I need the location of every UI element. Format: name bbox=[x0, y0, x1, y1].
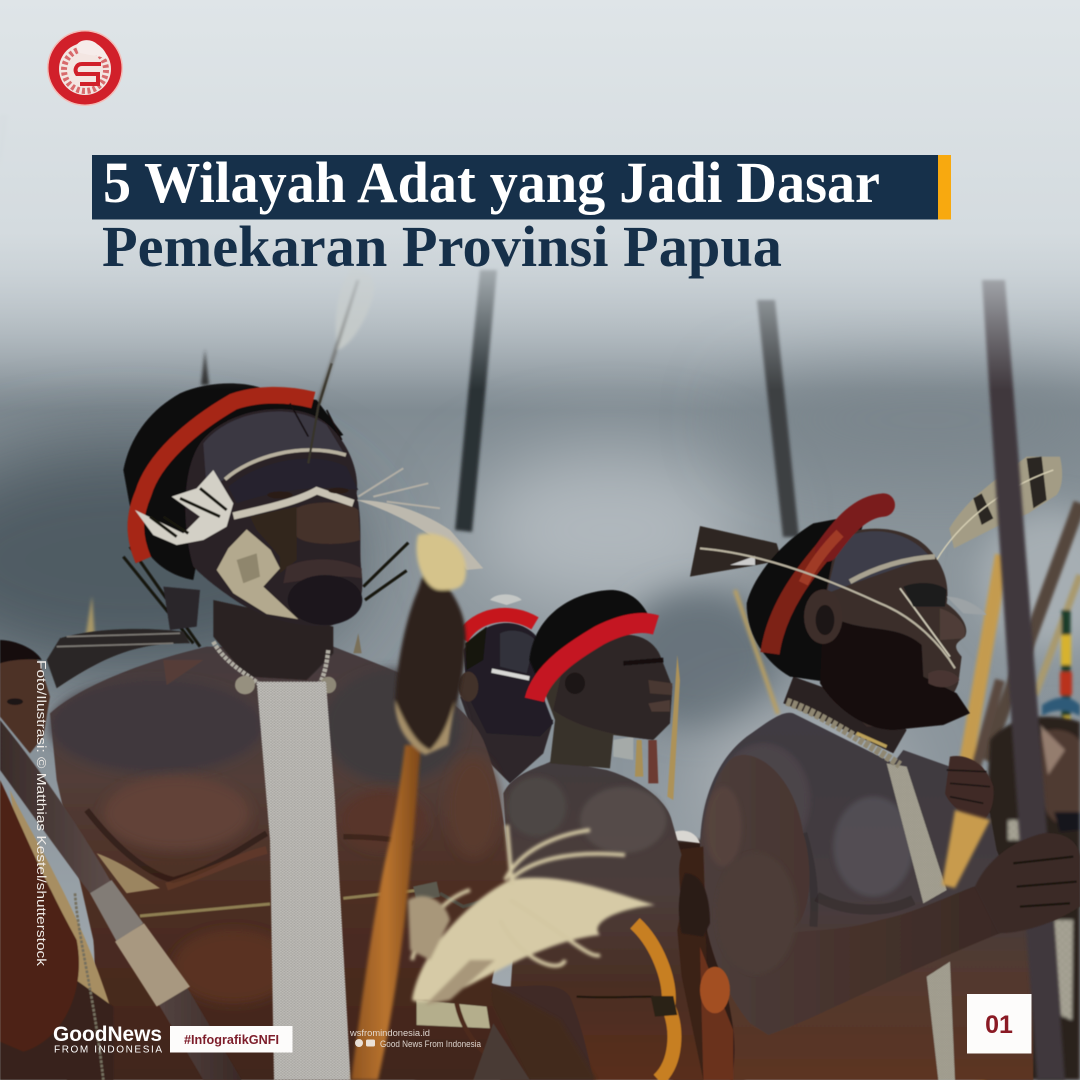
red band bbox=[462, 615, 535, 638]
white cheek paint bbox=[217, 529, 298, 619]
right hand gripping spear bbox=[975, 833, 1080, 933]
page number box bbox=[967, 994, 1032, 1054]
bird-of-paradise plume on arm bbox=[408, 825, 655, 1005]
face bbox=[463, 623, 553, 737]
hashtag box bbox=[170, 1026, 292, 1052]
brown patches on shoulder bbox=[163, 660, 203, 685]
website and social text: wsfromindonesia.id bbox=[349, 1028, 430, 1038]
torso bbox=[503, 760, 703, 1080]
woven wrap bbox=[115, 923, 190, 1007]
painted stripe bbox=[492, 671, 529, 678]
right arm bbox=[487, 980, 593, 1080]
shell collar and tie bbox=[213, 642, 351, 1080]
warrior left: right arm lower backing bbox=[415, 985, 597, 1080]
face bbox=[823, 529, 966, 727]
warrior left: head and headdress bbox=[47, 363, 483, 688]
wrist band bbox=[440, 893, 500, 907]
upper white headband bbox=[225, 450, 346, 479]
warrior right: neck and head bbox=[690, 457, 1062, 765]
background arrows and bows on right bbox=[735, 503, 1080, 1080]
hashtag box: #InfografikGNFI bbox=[184, 1032, 279, 1047]
facebook icon bbox=[355, 1039, 363, 1047]
cowrie shells bbox=[235, 676, 255, 694]
beard bbox=[820, 610, 970, 730]
shell necklace bbox=[787, 702, 900, 765]
orange bow bbox=[635, 923, 674, 1080]
spear staff with fur bbox=[351, 533, 466, 1080]
eye shadow and nose bbox=[903, 583, 947, 607]
GoodNews From Indonesia wordmark: GoodNews bbox=[53, 1023, 162, 1046]
title line 1 on navy bar bbox=[92, 155, 951, 220]
website and social text: Good News From Indonesia bbox=[380, 1039, 481, 1049]
far-left warrior head bbox=[0, 640, 50, 753]
page number box: 01 bbox=[985, 1011, 1013, 1039]
shell strap upper bbox=[887, 763, 947, 903]
headband bbox=[850, 557, 935, 582]
neck and back of head bbox=[540, 637, 653, 768]
warrior right: torso and arm bbox=[700, 713, 1033, 1080]
forehead bbox=[203, 412, 345, 490]
lips bbox=[928, 670, 959, 687]
face bbox=[185, 409, 362, 627]
white and black feather ornament bbox=[135, 470, 233, 545]
chin bbox=[288, 575, 362, 625]
background spears bbox=[0, 115, 799, 640]
quills behind neck bbox=[123, 543, 408, 647]
red band bbox=[534, 623, 656, 700]
distant crowd in centre bbox=[613, 655, 733, 1080]
title text line 1: 5 Wilayah Adat yang Jadi Dasar bbox=[103, 150, 880, 215]
fur tuft bbox=[395, 560, 466, 750]
grey belt right bbox=[417, 1000, 490, 1028]
quill upright bbox=[308, 363, 332, 463]
website and social text bbox=[349, 1028, 481, 1049]
ear bbox=[804, 589, 843, 644]
large diagonal spear foreground bbox=[0, 720, 242, 1080]
white painted eye band bbox=[233, 491, 353, 516]
face quills bbox=[700, 548, 955, 668]
banded feather bbox=[949, 457, 1062, 548]
dark backing under arm bbox=[0, 940, 113, 1080]
hair bbox=[529, 590, 648, 677]
warrior left: torso bbox=[50, 647, 530, 1080]
silver feather right bbox=[357, 500, 483, 570]
tan feathers on arm bbox=[10, 790, 113, 1017]
GoodNews From Indonesia wordmark: FROM INDONESIA bbox=[54, 1044, 162, 1056]
back-right warrior bbox=[985, 717, 1080, 1080]
main foreground spear bbox=[982, 280, 1065, 1080]
eagle head bbox=[76, 40, 107, 59]
title text line 2: Pemekaran Provinsi Papua bbox=[102, 214, 782, 279]
black quill feather bbox=[690, 526, 782, 577]
bamboo bundle behind hand bbox=[942, 810, 990, 888]
logo badge bbox=[47, 30, 123, 106]
warrior centre-back bbox=[458, 594, 553, 783]
right shoulder shading bbox=[473, 1023, 530, 1080]
red feather band bbox=[136, 395, 313, 560]
shell tie bbox=[257, 682, 351, 1080]
torso bbox=[700, 713, 1033, 1080]
braided cord bbox=[75, 893, 103, 1080]
lips bbox=[283, 559, 362, 583]
face bbox=[553, 634, 672, 740]
youtube icon bbox=[366, 1040, 375, 1046]
hair bbox=[465, 627, 487, 670]
hair bbox=[747, 513, 867, 683]
photo credit: Foto/Ilustrasi: © Matthias Kestel/shutterstock bbox=[34, 660, 48, 967]
dark hand bbox=[679, 873, 710, 937]
accent bar bbox=[938, 155, 951, 220]
hair bbox=[123, 383, 343, 580]
waist cord bbox=[140, 889, 427, 916]
dark crowd backing between warriors bbox=[670, 840, 745, 1080]
wooden staff bbox=[351, 745, 421, 1080]
red crest bbox=[770, 543, 830, 653]
warrior centre bbox=[487, 590, 710, 1080]
sky mist fading over the top bbox=[0, 0, 1080, 390]
white top feather bbox=[318, 268, 374, 405]
nose and cheeks bbox=[293, 502, 360, 544]
neck bbox=[783, 677, 907, 753]
neck and shoulder bbox=[460, 697, 553, 783]
upper arm and forearm bbox=[700, 755, 1013, 1035]
upper hand bbox=[945, 756, 994, 823]
warrior left: left arm bbox=[0, 780, 160, 1080]
G letter bbox=[76, 64, 101, 84]
neck bbox=[213, 600, 333, 680]
shell strap lower bbox=[927, 962, 955, 1080]
ear bbox=[458, 672, 478, 702]
